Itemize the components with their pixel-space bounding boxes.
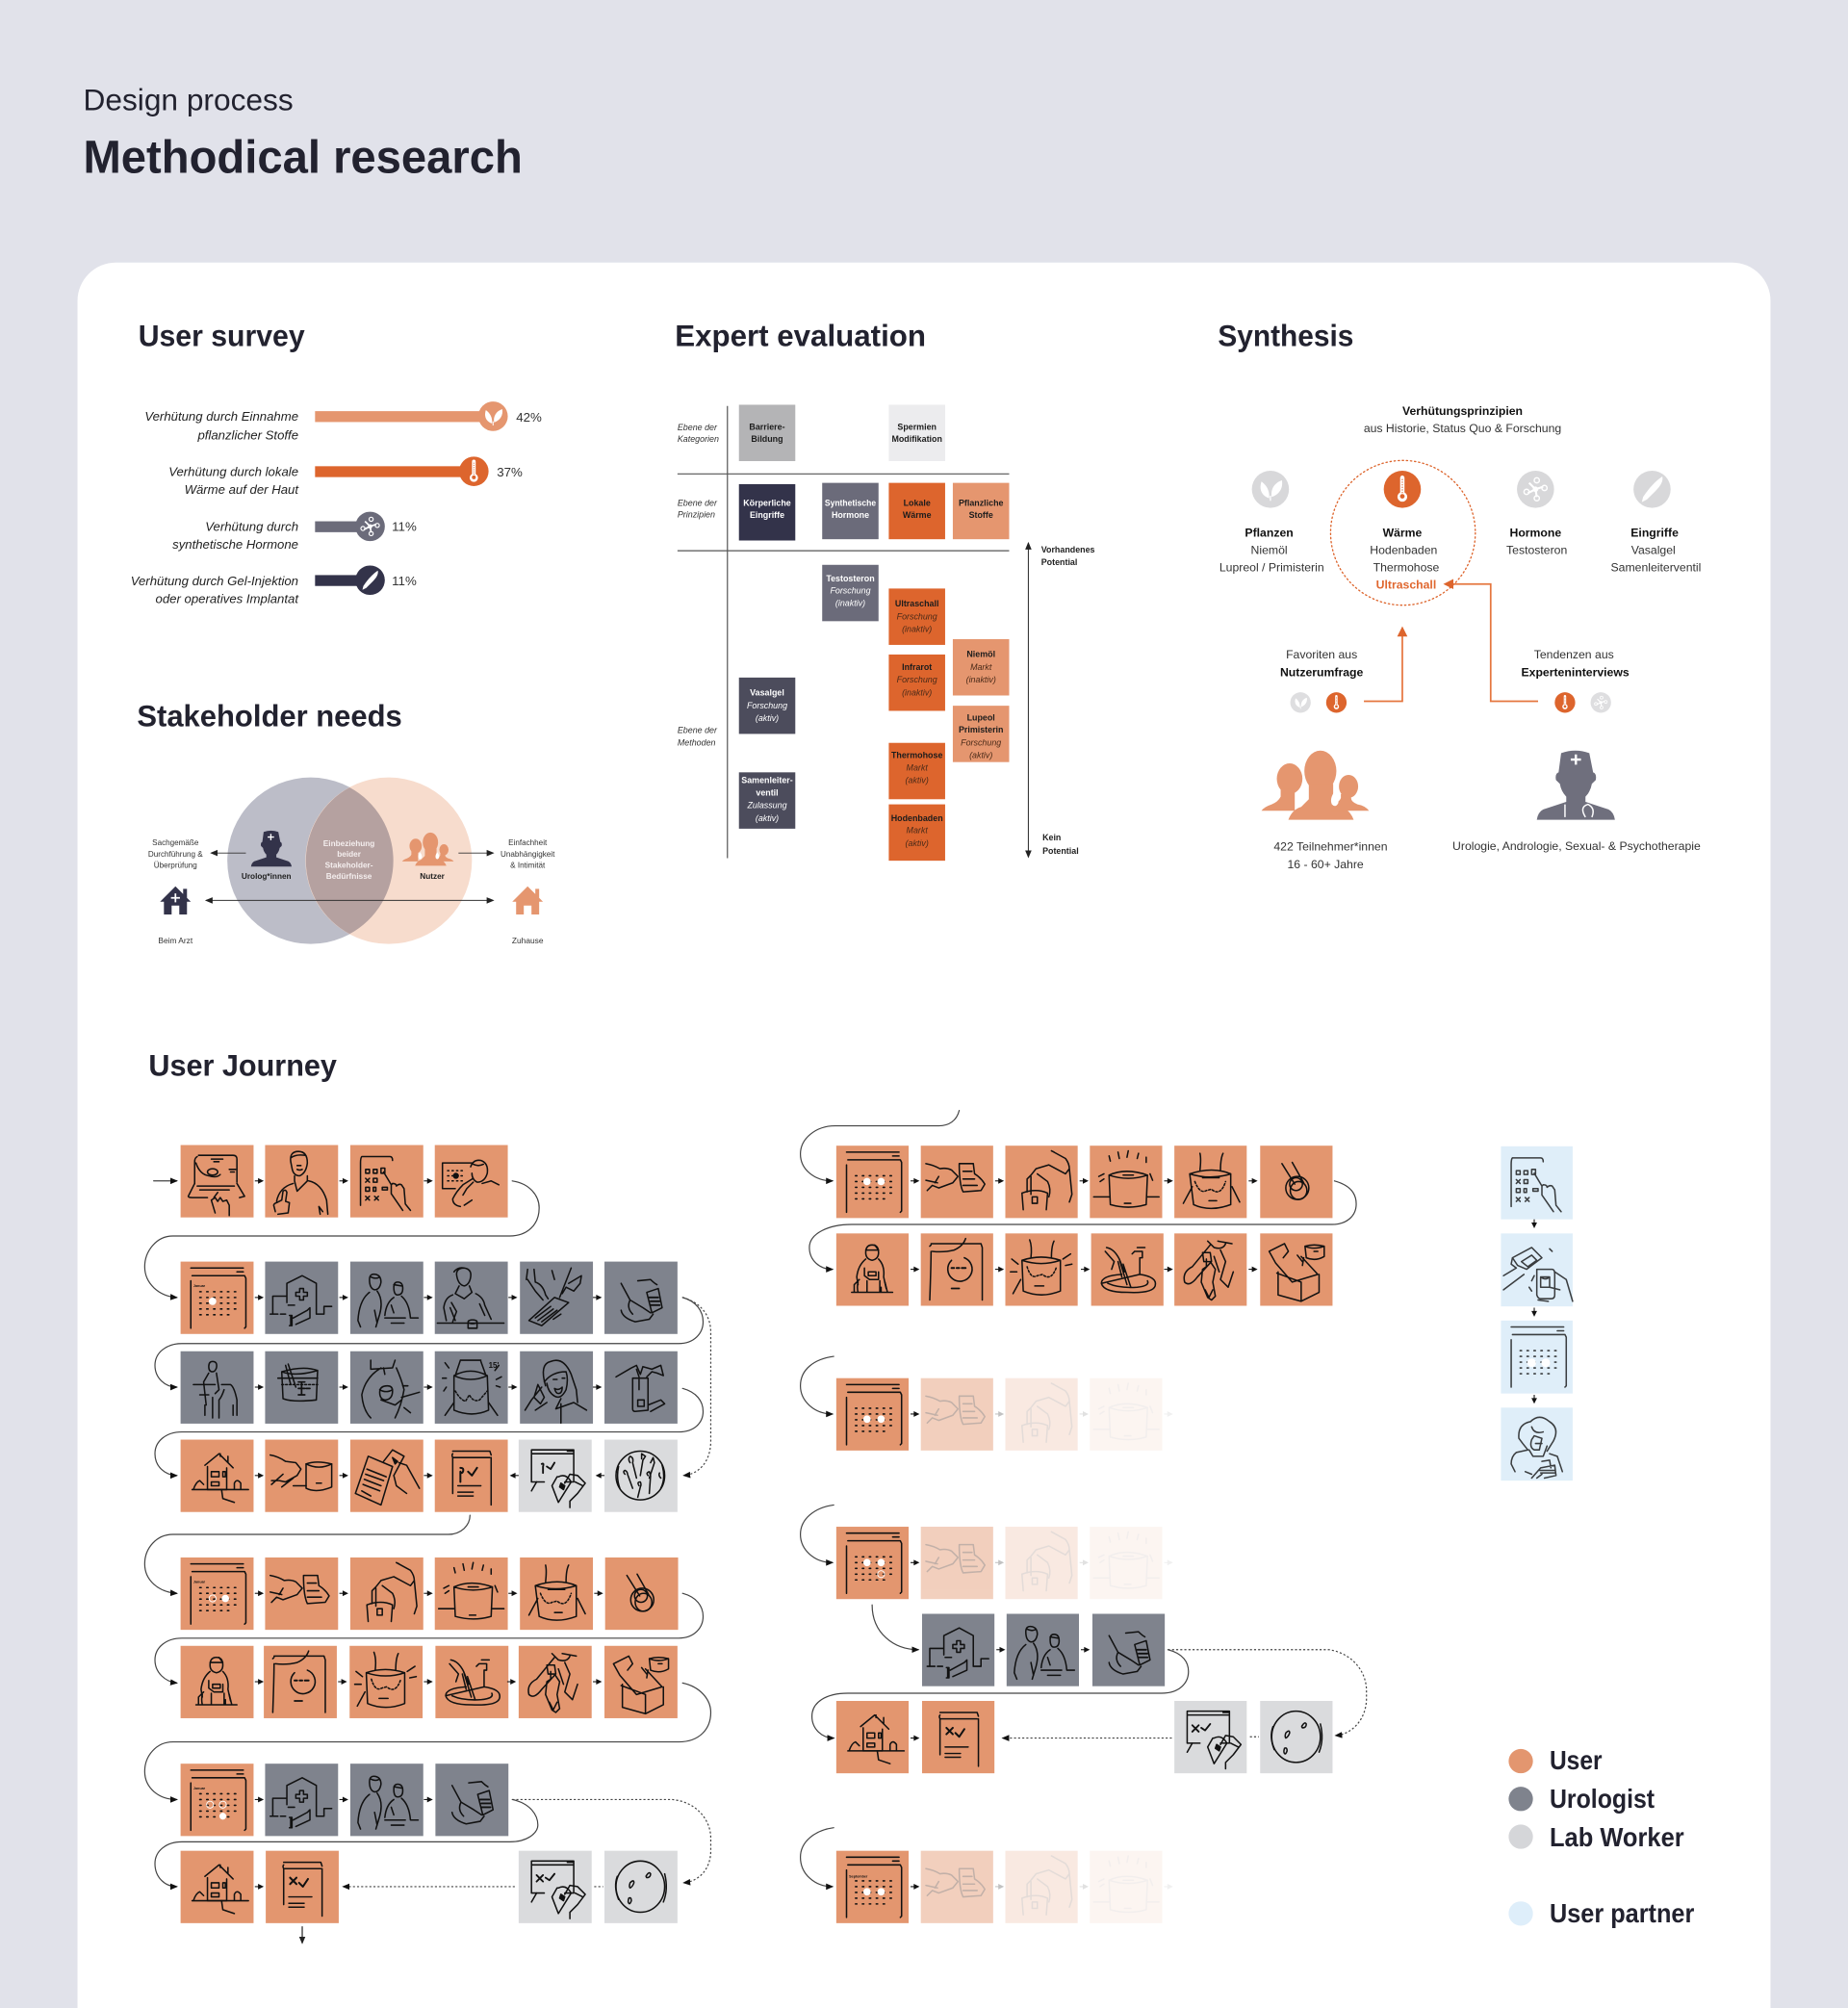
box: Hodenbaden — [888, 805, 945, 861]
survey row: local heat — [168, 456, 523, 497]
journey row 1: discovery — [181, 1146, 508, 1218]
survey row: hormones: Verhütung durch — [205, 520, 298, 534]
tile: petri dish — [1260, 1701, 1332, 1773]
box: Testosteron: Forschung — [830, 586, 871, 596]
box: Pflanzliche Stoffe: Pflanzliche — [959, 499, 1004, 508]
tile: fifteen minutes: 15' — [489, 1361, 499, 1370]
tile: calendar — [181, 1557, 253, 1630]
box: Testosteron: (inaktiv) — [835, 598, 865, 607]
tile: faded hot bath — [1090, 1851, 1162, 1923]
survey favourites: Favoriten aus — [1286, 648, 1357, 661]
tile: petri dish — [604, 1440, 678, 1512]
tile: calendar — [836, 1378, 909, 1451]
principle: Eingriffe: Samenleiterventil — [1610, 560, 1701, 574]
tile: timer — [264, 1646, 337, 1718]
tile: faded pouring — [1005, 1378, 1078, 1451]
box: Infrarot: Forschung — [897, 675, 937, 684]
tile: result — [266, 1851, 339, 1923]
right needs text: Unabhängigkeit — [500, 850, 555, 859]
heading: User survey: User survey — [139, 318, 305, 352]
box: Lupeol Primisterin: (aktiv) — [969, 751, 992, 760]
tile: lab screen — [1174, 1701, 1246, 1773]
label: Vorhandenes Potential — [1041, 545, 1095, 567]
box: Hodenbaden: (aktiv) — [906, 838, 929, 848]
tile: mixing — [265, 1557, 338, 1630]
principle: Eingriffe: Vasalgel — [1631, 543, 1676, 556]
tile: calendar January — [181, 1262, 253, 1334]
synthesis title: aus Historie, Status Quo & Forschung — [1364, 422, 1561, 435]
arrow: potential axis — [1027, 543, 1029, 857]
heading: User Journey: User Journey — [148, 1048, 337, 1083]
participant text — [1273, 839, 1388, 871]
tile: clinic — [922, 1614, 994, 1686]
tile: calendar: Januar — [193, 1787, 206, 1790]
principle: Hormone: Hormone — [1509, 527, 1561, 540]
box: Niemöl: Niemöl — [966, 650, 995, 659]
tile: heated cup — [1005, 1233, 1078, 1306]
tile: faded pouring — [1005, 1851, 1078, 1923]
tile: faded pouring — [1005, 1527, 1078, 1599]
tile: woman with phone — [1501, 1407, 1573, 1480]
overlap text: Einbeziehung — [323, 839, 374, 848]
box: Samenleiterventil: Zulassung — [746, 801, 787, 811]
tile: dressing — [1174, 1233, 1246, 1306]
box: Vasalgel: Vasalgel — [750, 688, 784, 698]
box: Lokale Wärme: Wärme — [903, 510, 932, 520]
tile: house — [181, 1851, 253, 1923]
box: Niemöl: Markt — [970, 662, 992, 672]
box: Samenleiterventil: (aktiv) — [756, 813, 779, 823]
icon: users — [402, 833, 453, 881]
box: Ultraschall — [888, 588, 945, 645]
label: Zuhause: Zuhause — [512, 936, 544, 945]
tile: faded hot bath — [1090, 1378, 1162, 1451]
box: Vasalgel — [739, 678, 795, 734]
principle: Wärme — [1370, 471, 1439, 591]
legend — [1508, 1745, 1694, 1928]
tile: bag — [604, 1352, 678, 1424]
principle: Pflanzen: Pflanzen — [1245, 527, 1294, 540]
box: Lupeol Primisterin: Primisterin — [959, 725, 1003, 734]
level labels: Ebene der — [678, 499, 718, 508]
header — [83, 83, 523, 184]
tile: hand with cup — [1092, 1614, 1165, 1686]
tile: sitting — [181, 1352, 253, 1424]
box: Lokale Wärme — [888, 483, 945, 539]
interview tendencies: Tendenzen aus — [1534, 648, 1614, 661]
left needs text — [148, 838, 203, 869]
survey row: local heat: Wärme auf der Haut — [185, 482, 299, 497]
tile: ring — [1260, 1146, 1332, 1218]
heading: Expert evaluation: Expert evaluation — [675, 318, 926, 352]
principle: Wärme: Wärme — [1383, 527, 1423, 540]
arrow: survey to Wärme — [1364, 629, 1402, 701]
survey row: plants — [144, 401, 542, 442]
overlap text: beider — [337, 850, 362, 859]
tile: house — [836, 1701, 909, 1773]
overlap text: Bedürfnisse — [326, 872, 372, 881]
box: Thermohose — [888, 743, 945, 799]
box: Synthetische Hormone: Synthetische — [825, 499, 876, 508]
box: Synthetische Hormone: Hormone — [832, 510, 869, 520]
right journey row 4: fading repeat — [836, 1527, 1173, 1599]
box: Pflanzliche Stoffe — [953, 483, 1009, 539]
box: Barriere-Bildung: Bildung — [751, 434, 783, 444]
tile: result — [922, 1701, 994, 1773]
tile: consultation — [350, 1763, 424, 1836]
box: Pflanzliche Stoffe: Stoffe — [969, 510, 993, 520]
box: Testosteron — [822, 565, 879, 621]
overlap text — [323, 839, 374, 881]
tile: sitting in bath — [1174, 1146, 1246, 1218]
panel: expert evaluation matrix — [678, 404, 1095, 861]
tile: pouring — [350, 1557, 424, 1630]
tile: petri dish — [604, 1851, 678, 1923]
principle: Hormone — [1506, 471, 1567, 556]
tile: calendar September — [836, 1851, 909, 1923]
right journey row 2: after bath — [836, 1233, 1332, 1306]
survey row: plants: pflanzlicher Stoffe — [196, 427, 298, 442]
tile: washing — [1091, 1233, 1164, 1306]
box: Ultraschall: Forschung — [897, 611, 937, 621]
journey row 6: after bath — [181, 1646, 678, 1718]
icon: participants — [1262, 751, 1369, 820]
right journey row 3: fading repeat — [836, 1378, 1173, 1451]
box: Synthetische Hormone — [822, 483, 879, 539]
right journey row 1: month two routine — [836, 1146, 1332, 1218]
right needs text: Einfachheit — [508, 838, 548, 847]
journey row 5: heat routine — [181, 1557, 679, 1630]
survey row: gel injection: Verhütung durch Gel-Injektion — [131, 574, 298, 588]
box: Infrarot — [888, 655, 945, 710]
survey favourites — [1280, 648, 1363, 712]
journey row 4: at home and lab — [181, 1440, 678, 1512]
box: Samenleiterventil: ventil — [756, 787, 779, 797]
tile: calendar — [1501, 1321, 1573, 1394]
white content card — [77, 263, 1771, 2008]
heading: Stakeholder needs: Stakeholder needs — [137, 698, 402, 733]
box: Samenleiterventil — [739, 772, 795, 829]
principle: Wärme: Ultraschall — [1376, 578, 1436, 591]
tile: hot bath — [1090, 1146, 1162, 1218]
icon: urologist — [242, 831, 292, 881]
box: Thermohose: Markt — [907, 762, 928, 772]
box: Thermohose: Thermohose — [891, 751, 942, 760]
tile: laptop — [181, 1146, 253, 1218]
tile: sitting front — [836, 1233, 909, 1306]
left needs text: Durchführung & — [148, 850, 203, 859]
box: Barriere-Bildung: Barriere- — [749, 422, 785, 431]
box: Vasalgel: (aktiv) — [756, 713, 779, 723]
legend item: Urologist: Urologist — [1550, 1784, 1655, 1814]
label: Kein Potential: Potential — [1042, 846, 1079, 856]
tile: consultation — [1007, 1614, 1079, 1686]
tile: box — [604, 1646, 678, 1718]
tile: calling — [435, 1146, 508, 1218]
right journey row 5: urologist visit — [922, 1614, 1165, 1686]
box: Spermien Modifikation: Modifikation — [891, 434, 942, 444]
right needs text: & Intimität — [510, 861, 546, 869]
legend item: User: User — [1550, 1745, 1603, 1775]
box: Testosteron: Testosteron — [826, 574, 875, 583]
eyebrow: Design process: Design process — [83, 83, 294, 116]
axis lines — [678, 406, 1009, 858]
tile: signing — [520, 1262, 593, 1334]
survey row: gel injection: oder operatives Implantat — [156, 592, 299, 606]
tile: thumbs up — [265, 1146, 338, 1218]
tile: man at table — [435, 1262, 508, 1334]
tile: talking — [520, 1352, 593, 1424]
dotted highlight circle — [1330, 460, 1476, 605]
box: Infrarot: Infrarot — [902, 662, 932, 672]
panel: user survey bars — [131, 401, 542, 606]
tile: phone apps — [350, 1146, 424, 1218]
tile: calendar — [181, 1763, 253, 1836]
survey row: hormones — [172, 512, 417, 552]
survey row: plants: 42% — [516, 410, 542, 425]
tile: heated cup — [349, 1646, 423, 1718]
arrow: doctor to home axis — [206, 899, 493, 901]
legend item: Lab Worker: Lab Worker — [1550, 1822, 1684, 1852]
box: Thermohose: (aktiv) — [906, 776, 929, 785]
box: Niemöl — [953, 639, 1009, 696]
tile: pouring — [1005, 1146, 1078, 1218]
level labels: Prinzipien — [678, 510, 715, 520]
principle: Eingriffe — [1610, 471, 1701, 574]
tile: consultation — [350, 1262, 424, 1334]
venn circle: urologists — [227, 778, 394, 944]
tile: washing — [435, 1646, 508, 1718]
survey row: hormones: 11% — [392, 520, 417, 534]
interview tendencies — [1521, 648, 1630, 712]
participant text: 422 Teilnehmer*innen — [1273, 839, 1388, 853]
tile: paper and phone — [350, 1440, 424, 1512]
principle: Pflanzen — [1219, 471, 1324, 574]
box: Ultraschall: (inaktiv) — [902, 625, 932, 634]
tile: hand with cup — [604, 1262, 678, 1334]
arrow: user needs — [458, 852, 493, 854]
principle: Eingriffe: Eingriffe — [1630, 527, 1679, 540]
panel: synthesis diagram — [1219, 404, 1701, 871]
tile: hand and jar — [265, 1440, 338, 1512]
right journey row 7: fading repeat — [836, 1851, 1173, 1923]
tile: calendar — [836, 1527, 909, 1599]
right needs text — [500, 838, 555, 869]
survey row: gel injection — [131, 565, 417, 606]
journey row 8: result — [181, 1851, 678, 1923]
box: Vasalgel: Forschung — [747, 701, 787, 710]
box: Infrarot: (inaktiv) — [902, 688, 932, 698]
label: Kein Potential: Kein — [1042, 833, 1061, 842]
tile: calendar January: Januar — [193, 1284, 206, 1288]
tile: faded mixing — [921, 1851, 993, 1923]
participant text: 16 - 60+ Jahre — [1288, 858, 1364, 871]
label: Kein Potential — [1042, 833, 1079, 856]
expert text: Urologie, Andrologie, Sexual- & Psychotherapie — [1452, 839, 1701, 853]
box: Lupeol Primisterin: Lupeol — [967, 712, 995, 722]
legend item: User — [1508, 1745, 1603, 1775]
legend item: Urologist — [1508, 1784, 1655, 1814]
journey row 2: first appointment — [181, 1262, 678, 1334]
tile: mixing — [921, 1146, 993, 1218]
title: Methodical research: Methodical research — [83, 133, 523, 184]
tile: calendar: Januar — [193, 1581, 206, 1584]
level labels: Ebene der — [678, 423, 718, 432]
journey flow lines: right column — [801, 1111, 1367, 1887]
survey favourites: Nutzerumfrage — [1280, 666, 1363, 680]
left needs text: Überprüfung — [154, 861, 197, 869]
tile: clinic — [265, 1262, 338, 1334]
overlap text: Stakeholder- — [325, 861, 373, 869]
tile: box — [1260, 1233, 1332, 1306]
survey row: plants: Verhütung durch Einnahme — [144, 409, 298, 424]
box: Körperliche Eingriffe: Körperliche — [743, 499, 791, 508]
box: Hodenbaden: Hodenbaden — [891, 813, 943, 823]
tile: faded mixing — [921, 1378, 993, 1451]
tile: result — [435, 1440, 508, 1512]
tile: lab screen — [519, 1440, 592, 1512]
box: Spermien Modifikation — [888, 404, 945, 461]
box: Körperliche Eingriffe: Eingriffe — [750, 510, 784, 520]
arrow: urologist needs — [212, 852, 245, 854]
synthesis title — [1364, 404, 1561, 435]
box: Niemöl: (inaktiv) — [966, 675, 996, 684]
icon: urologist: Urolog*innen — [242, 872, 292, 881]
tile: phone apps — [1501, 1146, 1573, 1220]
tile: phone and cup — [1501, 1233, 1573, 1306]
box: Körperliche Eingriffe — [739, 484, 795, 541]
survey row: local heat: 37% — [497, 465, 523, 479]
left needs text: Sachgemäße — [152, 838, 199, 847]
principle: Pflanzen: Niemöl — [1251, 543, 1288, 556]
tile: legs and cup — [350, 1352, 424, 1424]
tile: sitting front — [181, 1646, 253, 1718]
box: Lupeol Primisterin — [953, 706, 1009, 762]
tile: faded hot bath — [1090, 1527, 1162, 1599]
heading: Synthesis: Synthesis — [1218, 318, 1353, 352]
venn overlap — [306, 787, 394, 934]
level labels: Ebene der — [678, 726, 718, 735]
tile: hand with cup — [435, 1763, 508, 1836]
label: Vorhandenes Potential: Potential — [1041, 557, 1077, 567]
survey row: gel injection: 11% — [392, 574, 417, 588]
tile: jar — [265, 1352, 338, 1424]
tile: sitting in bath — [520, 1557, 593, 1630]
icon: home — [512, 887, 543, 914]
journey row 3: sample at clinic — [181, 1352, 678, 1424]
journey row 7: follow-up — [181, 1763, 508, 1836]
legend item: User partner: User partner — [1550, 1898, 1694, 1928]
icon: experts — [1537, 751, 1615, 820]
principle: Pflanzen: Lupreol / Primisterin — [1219, 560, 1324, 574]
survey row: local heat: Verhütung durch lokale — [168, 464, 298, 478]
tile: hot bath — [435, 1557, 508, 1630]
venn circle: users — [305, 778, 472, 944]
survey row: hormones: synthetische Hormone — [172, 537, 298, 552]
tile: lab screen — [519, 1851, 592, 1923]
right journey row 6: result — [836, 1701, 1332, 1773]
icon: users: Nutzer — [420, 872, 446, 881]
principle: Wärme: Thermohose — [1373, 560, 1439, 574]
box: Lokale Wärme: Lokale — [904, 499, 931, 508]
box: Ultraschall: Ultraschall — [895, 599, 938, 608]
tile: calendar September: September — [849, 1875, 868, 1879]
synthesis title: Verhütungsprinzipien — [1402, 404, 1523, 418]
box: Spermien Modifikation: Spermien — [897, 422, 937, 431]
icon: clinic house — [160, 887, 191, 914]
tile: ring — [605, 1557, 679, 1630]
tile: calendar — [836, 1146, 909, 1218]
tile: timer — [921, 1233, 993, 1306]
level labels: Kategorien — [678, 434, 719, 444]
tile: faded mixing — [921, 1527, 993, 1599]
level labels: Methoden — [678, 737, 716, 747]
tile: fifteen minutes — [435, 1352, 508, 1424]
box: Samenleiterventil: Samenleiter- — [741, 776, 793, 785]
user partner journey — [1501, 1146, 1573, 1480]
label: Beim Arzt: Beim Arzt — [158, 936, 193, 945]
tile: clinic — [265, 1763, 338, 1836]
tile: house — [181, 1440, 253, 1512]
journey flow lines: left column — [144, 1181, 710, 1943]
box: Lupeol Primisterin: Forschung — [961, 737, 1001, 747]
principle: Hormone: Testosteron — [1506, 543, 1567, 556]
box: Hodenbaden: Markt — [907, 826, 928, 836]
box: Barriere-Bildung — [739, 404, 795, 461]
panel: stakeholder venn diagram — [148, 778, 555, 945]
label: Vorhandenes Potential: Vorhandenes — [1041, 545, 1095, 554]
tile: dressing — [519, 1646, 592, 1718]
level labels — [678, 423, 719, 747]
arrow: interviews to Ultraschall — [1446, 584, 1538, 701]
principle: Wärme: Hodenbaden — [1370, 543, 1438, 556]
interview tendencies: Experteninterviews — [1521, 666, 1630, 680]
